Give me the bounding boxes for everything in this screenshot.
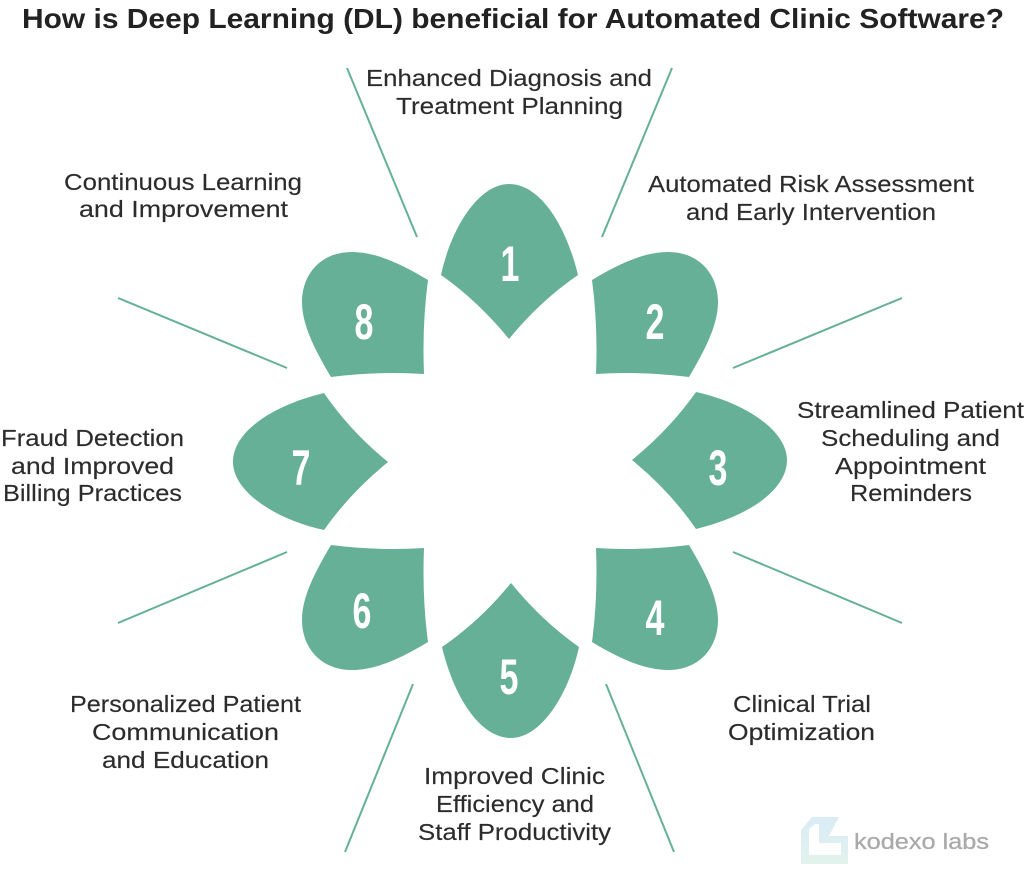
label 6: Personalized Communication: Personalized Patient: [70, 691, 302, 717]
label 7: Fraud Detection: [1, 425, 184, 506]
petal 3: [632, 392, 787, 529]
label 3: Streamlined Scheduling: [797, 397, 1024, 506]
label 8: Continuous Learning: and Improvement: [79, 196, 289, 222]
icon: logo mark: [801, 817, 848, 864]
petal numbers: [292, 237, 727, 706]
petal 7: [233, 393, 388, 530]
number 7: 7: [292, 441, 310, 497]
label 8: Continuous Learning: [64, 169, 302, 222]
label 4: Clinical Trial: Optimization: [728, 719, 875, 745]
label 7: Fraud Detection: Fraud Detection: [1, 425, 184, 451]
label 5: Improved Clinic Efficiency: Staff Productivity: [418, 819, 612, 845]
petal 1: [441, 184, 578, 339]
label 3: Streamlined Scheduling: Reminders: [850, 480, 972, 506]
label 2: Automated Risk Assessment: and Early Intervention: [686, 199, 936, 225]
label 6: Personalized Communication: and Education: [102, 747, 269, 773]
number 8: 8: [355, 295, 373, 351]
label 3: Streamlined Scheduling: Scheduling and: [821, 425, 1000, 451]
label 2: Automated Risk Assessment: [648, 171, 975, 225]
label 3: Streamlined Scheduling: Streamlined Patient: [797, 397, 1024, 423]
number 5: 5: [500, 650, 518, 706]
petal 6: [302, 545, 428, 670]
number 4: 4: [646, 591, 665, 647]
title: How is Deep Learning (DL) beneficial for Automated Clinic Software?: [22, 3, 1004, 34]
petal flower diagram: [233, 184, 787, 738]
number 2: 2: [646, 295, 664, 351]
label 4: Clinical Trial: Clinical Trial: [733, 691, 871, 717]
number 6: 6: [353, 584, 371, 640]
petal 5: [442, 583, 579, 738]
label 5: Improved Clinic Efficiency: [418, 763, 612, 845]
label 7: Fraud Detection: and Improved: [11, 453, 174, 479]
label 1: Enhanced Diagnosis: [366, 65, 652, 119]
connector lines: [118, 68, 902, 852]
label 1: Enhanced Diagnosis: Enhanced Diagnosis and: [366, 65, 652, 91]
label 2: Automated Risk Assessment: Automated Risk Assessment: [648, 171, 975, 197]
petal 8: [302, 252, 428, 377]
label 4: Clinical Trial: [728, 691, 875, 745]
number 3: 3: [709, 441, 727, 497]
label 6: Personalized Communication: Communication: [92, 719, 279, 745]
petal 4: [592, 545, 718, 670]
petal 2: [592, 252, 718, 377]
label 5: Improved Clinic Efficiency: Improved Clinic: [424, 763, 605, 789]
label 3: Streamlined Scheduling: Appointment: [835, 453, 987, 479]
label 5: Improved Clinic Efficiency: Efficiency and: [436, 791, 594, 817]
label 8: Continuous Learning: Continuous Learning: [64, 169, 302, 195]
label 7: Fraud Detection: Billing Practices: [3, 480, 182, 506]
logo: kodexo labs: [801, 817, 989, 864]
label 6: Personalized Communication: [70, 691, 302, 773]
label 1: Enhanced Diagnosis: Treatment Planning: [396, 93, 623, 119]
logo wordmark: kodexo labs: [854, 829, 989, 854]
number 1: 1: [501, 237, 519, 293]
